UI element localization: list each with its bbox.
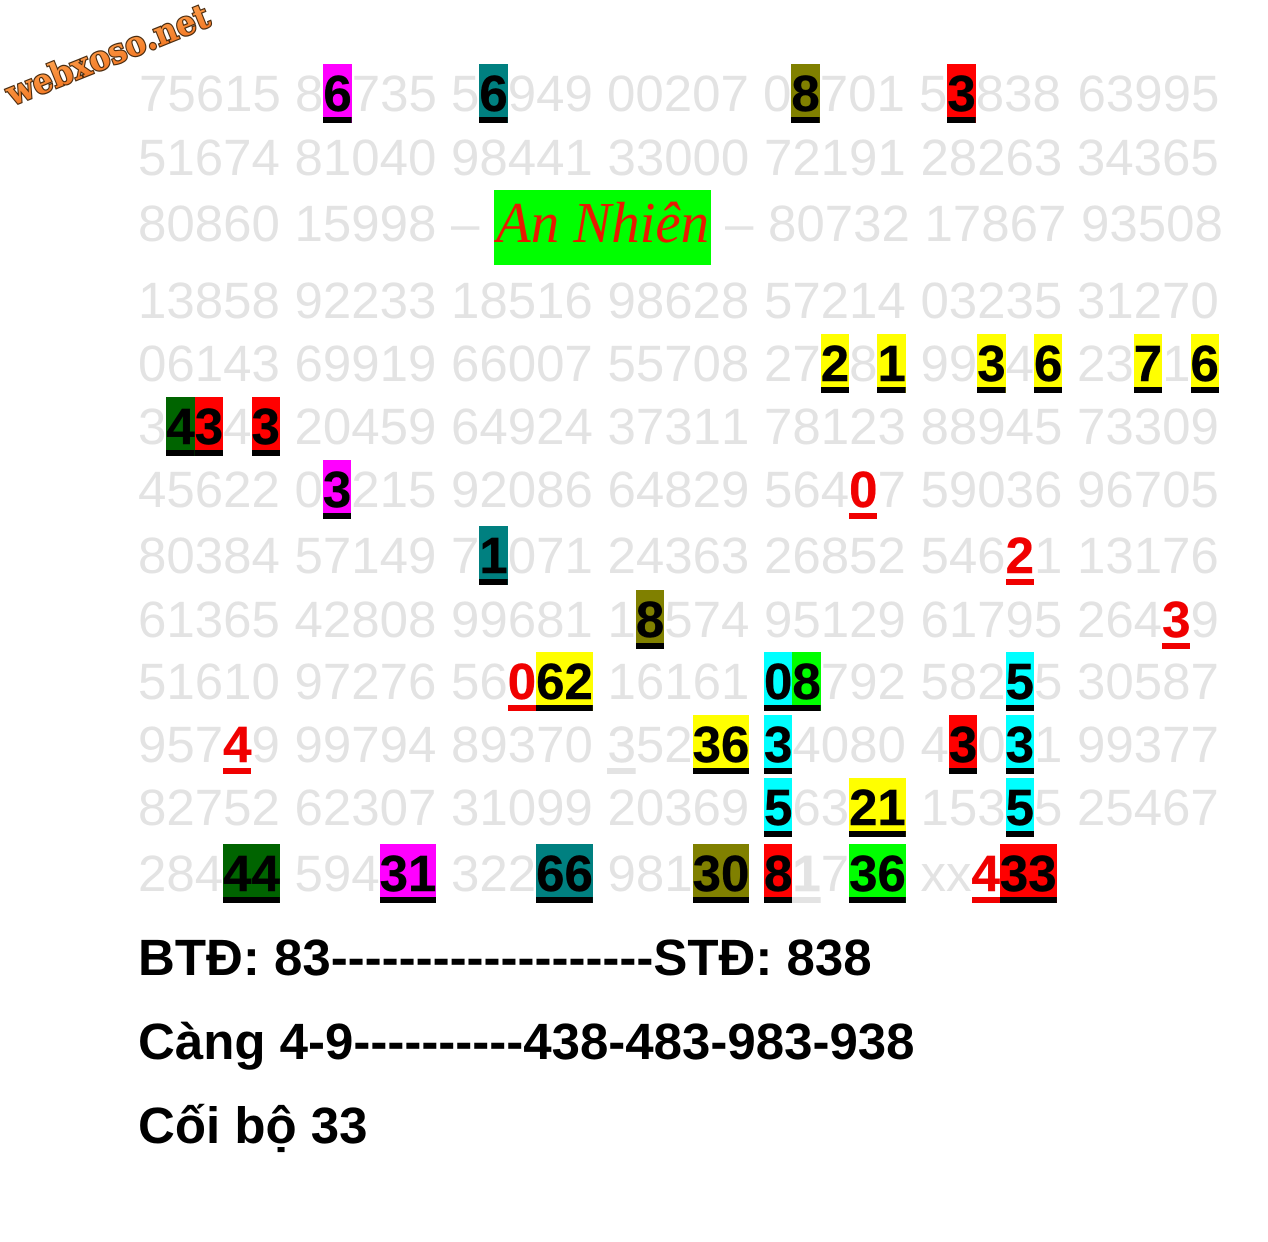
number row 9: 61365 42808 99681 18574 95129 61795 26439 — [138, 591, 1219, 648]
number row 11: 95749 99794 89370 35236 34080 43031 99377 — [138, 716, 1219, 773]
number row 1 last group: 63995 — [1078, 65, 1219, 122]
number row 10: 51610 97276 56062 16161 08792 58255 30587 — [138, 653, 1219, 710]
number row 1: 75615 86735 56949 00207 08701 53838 — [139, 65, 1061, 122]
number row 7: 45622 03215 92086 64829 56407 59036 96705 — [138, 461, 1219, 518]
title badge: An Nhiên: An Nhiên — [494, 190, 709, 255]
number row 3 left part: 80860 15998 – — [138, 195, 479, 252]
summary line: Càng: Càng 4-9----------438-483-983-938 — [138, 1013, 915, 1070]
number row 12: 82752 62307 31099 20369 56321 15355 25467 — [138, 779, 1219, 836]
number row 4: 13858 92233 18516 98628 57214 03235 31270 — [138, 272, 1219, 329]
number row 8: 80384 57149 71071 24363 26852 54621 13176 — [138, 527, 1219, 584]
number row 13: 28444 59431 32266 98130 81736 xx433 — [138, 845, 1057, 902]
summary line: BTĐ and STĐ: BTĐ: 83-------------------STĐ: 838 — [138, 929, 872, 986]
number row 3 right part: – 80732 17867 93508 — [725, 195, 1223, 252]
number row 5: 06143 69919 66007 55708 27281 99346 23716 — [138, 335, 1219, 392]
summary line: Cối bộ: Cối bộ 33 — [138, 1097, 368, 1154]
number row 6: 34343 20459 64924 37311 78123 88945 73309 — [138, 398, 1219, 455]
number row 2: 51674 81040 98441 33000 72191 28263 34365 — [138, 129, 1219, 186]
